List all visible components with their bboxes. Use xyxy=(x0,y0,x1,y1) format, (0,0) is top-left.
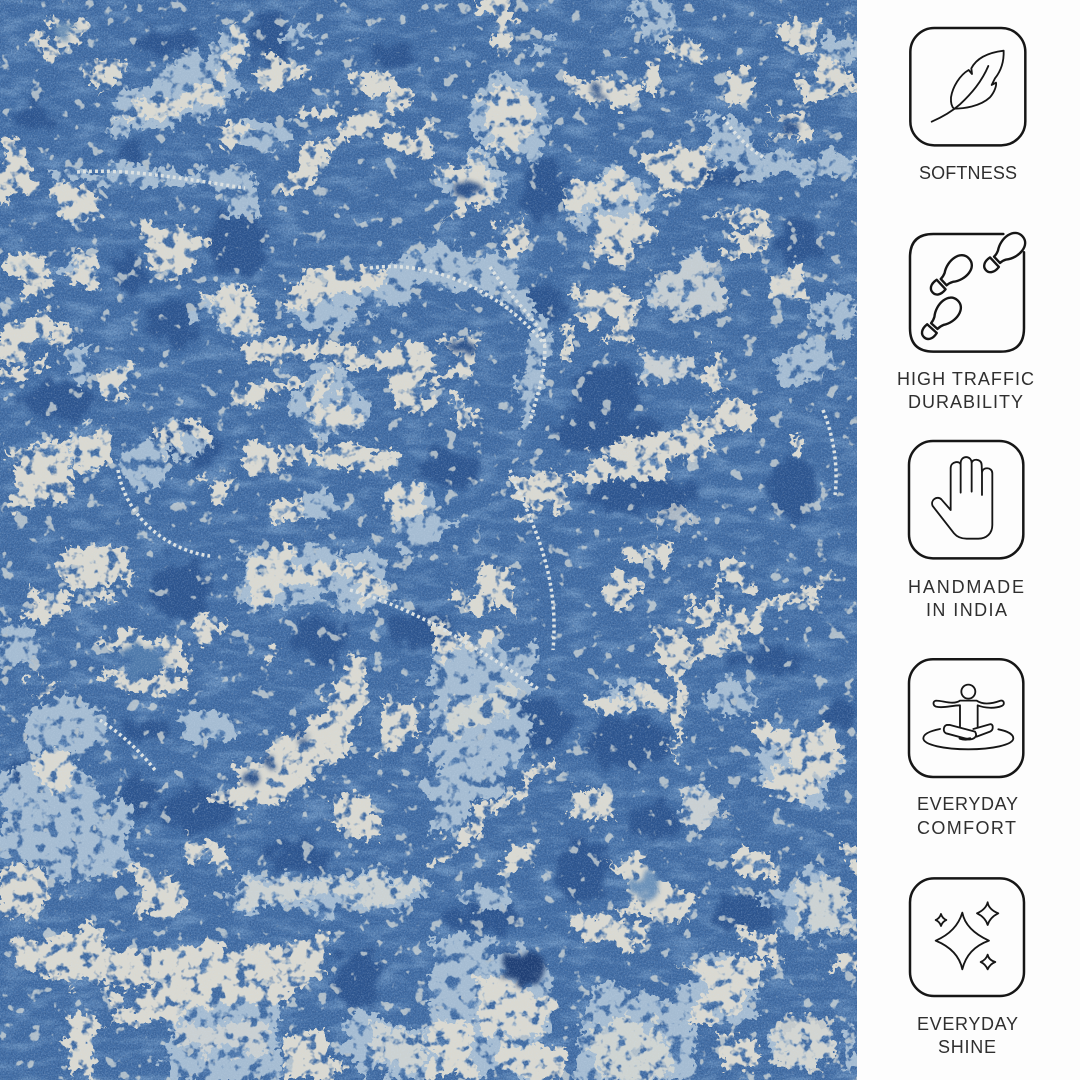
rug pale blue motifs xyxy=(0,0,857,1080)
label: high traffic durability: DURABILITY xyxy=(908,392,1023,412)
rug dark details xyxy=(51,19,799,984)
rug cream motifs xyxy=(0,0,857,1080)
icon: footprints in rounded square xyxy=(910,228,1030,352)
feature: everyday comfort xyxy=(909,659,1023,838)
panel: rug photo xyxy=(0,0,857,1080)
rug stitched lines xyxy=(77,117,836,770)
panel: features xyxy=(897,26,1034,1057)
rug light fibre grain xyxy=(0,0,857,1080)
rug mottled wool tone xyxy=(0,0,857,1080)
icon: feather in rounded square xyxy=(910,28,1025,145)
icon: sparkles in rounded square xyxy=(910,878,1024,996)
label: everyday shine xyxy=(917,1014,1018,1057)
rug dark patches xyxy=(7,10,857,1007)
label: everyday comfort: EVERYDAY xyxy=(917,794,1018,814)
icon: seated yoga figure in rounded square xyxy=(909,659,1023,777)
label: handmade in india: IN INDIA xyxy=(926,600,1007,620)
icon: hand in rounded square xyxy=(909,441,1023,558)
rug base colour xyxy=(0,0,857,1080)
label: high traffic durability xyxy=(897,369,1034,412)
feature: everyday shine xyxy=(910,878,1024,1057)
label: handmade in india: HANDMADE xyxy=(908,577,1024,597)
rug fibre grain xyxy=(0,0,857,1080)
label: everyday shine: EVERYDAY xyxy=(917,1014,1018,1034)
label: handmade in india xyxy=(908,577,1024,620)
label: everyday shine: SHINE xyxy=(938,1037,996,1057)
feature: high traffic durability xyxy=(897,228,1034,412)
feature: softness xyxy=(910,28,1025,183)
rug cream flecks xyxy=(0,0,857,1080)
label: everyday comfort: COMFORT xyxy=(917,818,1016,838)
feature: handmade in india xyxy=(908,441,1024,620)
label: everyday comfort xyxy=(917,794,1018,838)
label: high traffic durability: HIGH TRAFFIC xyxy=(897,369,1034,389)
label: softness: SOFTNESS xyxy=(919,163,1017,183)
